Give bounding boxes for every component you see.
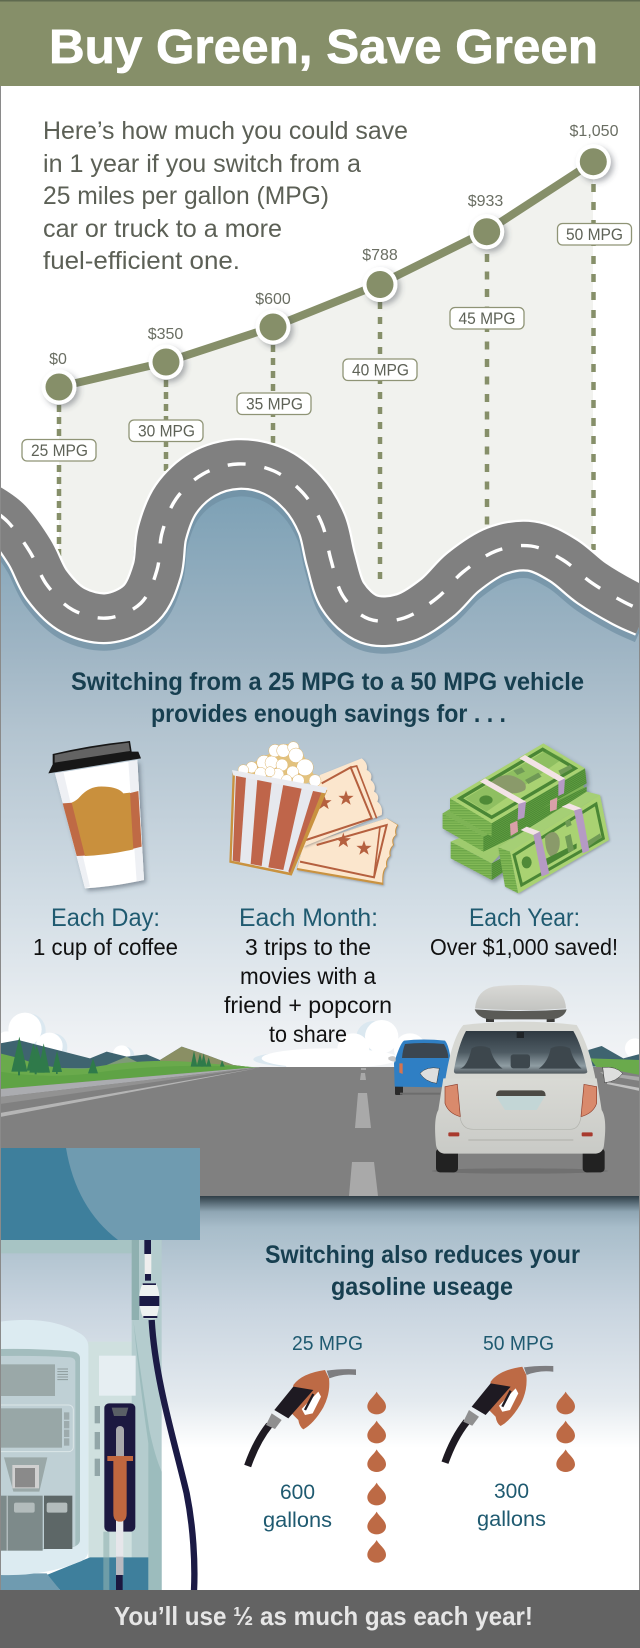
nozzle holder	[104, 1403, 135, 1591]
icon: fuel nozzle	[445, 1366, 553, 1463]
highway	[0, 1067, 640, 1197]
intro text: 25 miles per gallon (MPG)	[43, 182, 329, 210]
popcorn	[238, 742, 321, 787]
each year caption: Each Year:	[469, 904, 580, 932]
gasoline heading: Switching also reduces your	[265, 1241, 580, 1269]
dollar labels: $600	[255, 291, 291, 308]
winding road	[0, 464, 640, 627]
icon: stacks of money	[443, 743, 609, 893]
each month caption: 3 trips to the	[245, 934, 371, 960]
icon: silver car	[420, 985, 623, 1174]
dollar labels: $0	[49, 351, 67, 368]
data points	[42, 144, 611, 404]
icon: blue car	[388, 1039, 452, 1095]
50 MPG comparison	[445, 1333, 575, 1531]
roof box	[475, 985, 567, 1022]
gasoline heading	[265, 1241, 580, 1301]
MPG labels: 30 MPG	[138, 422, 195, 440]
25 MPG comparison: gallons	[263, 1509, 332, 1532]
50 MPG comparison: 300	[494, 1480, 529, 1503]
trees	[11, 1037, 225, 1075]
gas pump	[0, 1240, 194, 1591]
MPG labels: 25 MPG	[31, 441, 88, 460]
intro text: car or truck to a more	[43, 215, 282, 243]
savings heading: provides enough savings for . . .	[151, 700, 506, 728]
50 MPG comparison: 50 MPG	[483, 1333, 554, 1355]
each month caption: friend + popcorn	[224, 992, 392, 1018]
gasoline section background	[0, 1196, 640, 1590]
25 MPG comparison: 600	[280, 1481, 315, 1504]
landscape with clouds, hills and trees	[0, 1013, 426, 1090]
icon: fuel drops	[367, 1392, 386, 1563]
fuel hose	[139, 1240, 194, 1591]
intro text: in 1 year if you switch from a	[43, 150, 361, 178]
bucket	[229, 772, 327, 876]
MPG labels: 40 MPG	[352, 360, 409, 380]
ticket	[303, 758, 382, 847]
each day caption	[33, 904, 178, 960]
each year caption	[430, 904, 618, 960]
dollar labels: $933	[468, 193, 503, 210]
each month caption: movies with a	[240, 963, 376, 989]
dollar labels	[49, 123, 619, 368]
savings heading	[71, 668, 584, 728]
dollar labels: $1,050	[570, 123, 619, 140]
dollar labels: $350	[148, 326, 183, 343]
each day caption: Each Day:	[51, 904, 160, 932]
footer banner: You’ll use ½ as much gas each year!	[114, 1601, 533, 1631]
gasoline heading: gasoline useage	[331, 1273, 513, 1301]
each day caption: 1 cup of coffee	[33, 934, 178, 960]
gas station canopy	[0, 1148, 200, 1240]
each month caption	[224, 904, 392, 1047]
icon: fuel drops	[556, 1392, 575, 1472]
each month caption: to share	[269, 1021, 347, 1047]
savings heading: Switching from a 25 MPG to a 50 MPG vehicle	[71, 668, 584, 696]
clouds	[0, 1013, 426, 1070]
intro text: Here’s how much you could save	[43, 117, 408, 145]
footer banner	[0, 1590, 640, 1648]
25 MPG comparison: 25 MPG	[292, 1333, 363, 1355]
icon: popcorn and tickets	[229, 742, 398, 885]
25 MPG comparison	[248, 1333, 386, 1563]
MPG labels: 35 MPG	[246, 394, 303, 414]
sky background	[0, 464, 640, 1070]
ticket	[297, 818, 398, 885]
MPG labels: 50 MPG	[566, 225, 623, 244]
dollar labels: $788	[362, 247, 398, 264]
intro text	[43, 117, 408, 275]
dispenser	[0, 1320, 88, 1575]
each month caption: Each Month:	[239, 904, 378, 932]
title: Buy Green, Save Green	[49, 21, 598, 74]
MPG labels	[22, 224, 632, 461]
right landscape behind cars	[588, 1038, 640, 1077]
50 MPG comparison: gallons	[477, 1508, 546, 1531]
savings line chart	[22, 123, 632, 650]
MPG labels: 45 MPG	[458, 309, 516, 328]
icon: coffee cup	[48, 741, 144, 888]
each year caption: Over $1,000 saved!	[430, 934, 618, 960]
icon: fuel nozzle	[248, 1369, 356, 1466]
intro text: fuel-efficient one.	[43, 247, 240, 275]
header banner	[0, 0, 640, 86]
